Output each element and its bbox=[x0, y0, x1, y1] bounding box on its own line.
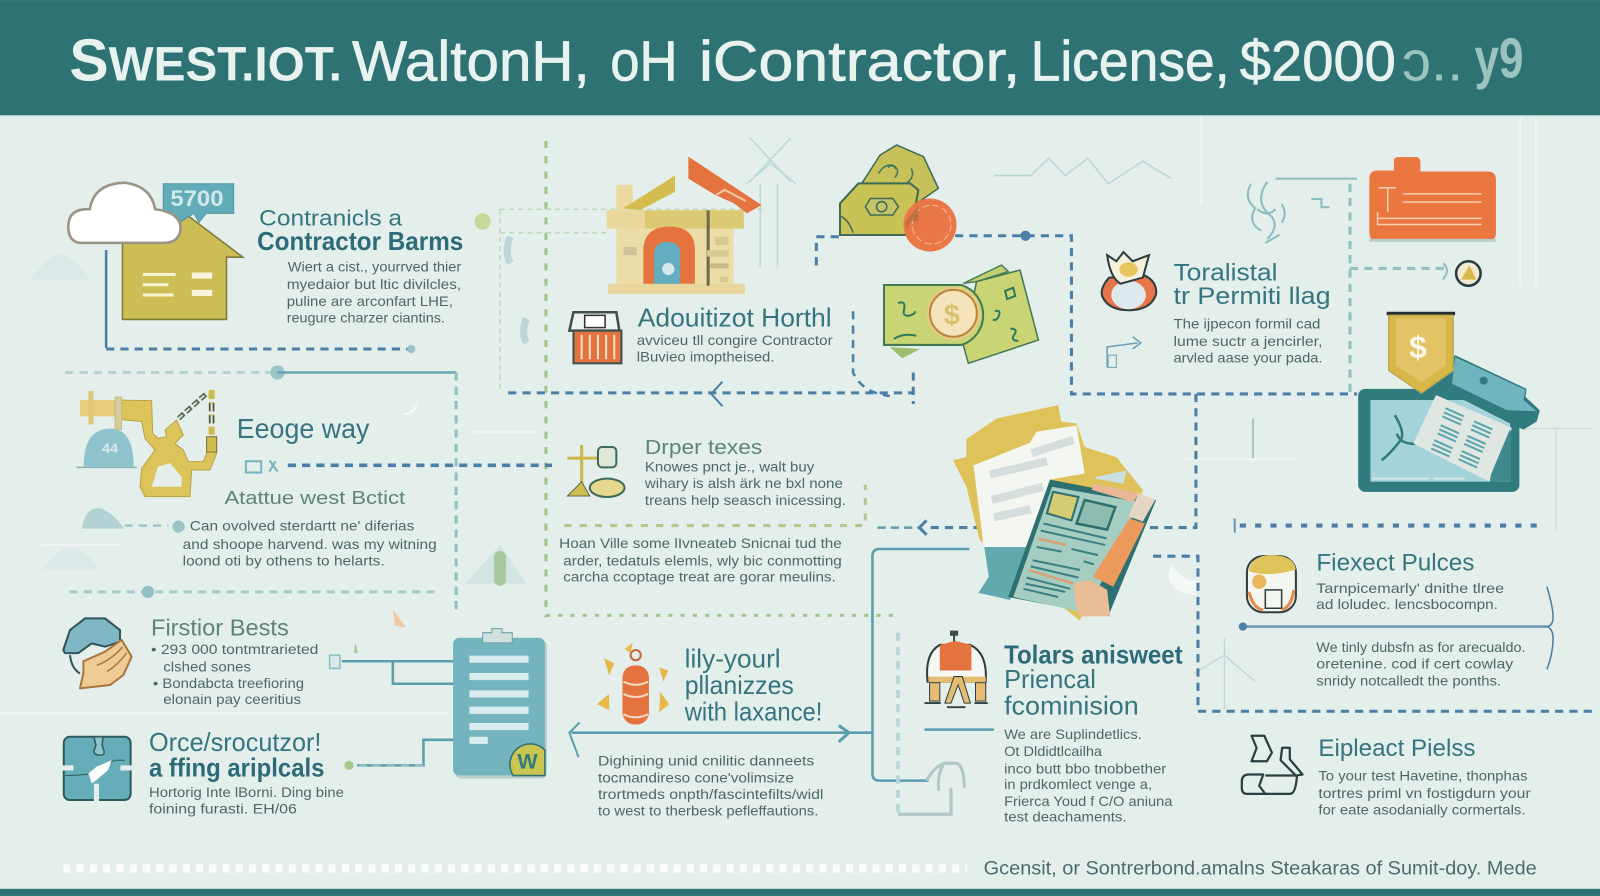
bullet list: • Bondabcta treefioring bbox=[153, 676, 304, 692]
body text bbox=[1173, 317, 1322, 366]
heading: Fiexect Pulces bbox=[1316, 549, 1474, 576]
icon: pipes and chain: 44 bbox=[102, 441, 118, 457]
icon: cash and gold coin bbox=[884, 265, 1038, 363]
body text bbox=[183, 519, 437, 569]
body text: puline are arconfart LHE, bbox=[287, 294, 453, 310]
body text bbox=[149, 785, 344, 817]
icon: clipboard bbox=[453, 629, 547, 779]
title: y9 bbox=[1474, 27, 1523, 90]
icon: wallet with dollar badge: $ bbox=[1409, 329, 1427, 365]
body text: To your test Havetine, thonphas bbox=[1318, 769, 1528, 785]
heading: Eeoge way bbox=[237, 413, 370, 444]
background decorations bbox=[0, 117, 1592, 713]
heading: tr Permiti llag bbox=[1173, 283, 1331, 310]
icon: wallet with dollar badge bbox=[1358, 312, 1540, 492]
body text: arvled aase your pada. bbox=[1173, 350, 1322, 366]
body text bbox=[287, 259, 461, 326]
body text: Knowes pnct je., walt buy bbox=[645, 459, 815, 475]
title: oH bbox=[610, 30, 678, 93]
body text: snridy notcalledt the ponths. bbox=[1316, 674, 1501, 690]
body text: Ot Dldidtlcailha bbox=[1004, 744, 1102, 760]
heading bbox=[1173, 260, 1331, 310]
icon: puzzle piece bbox=[62, 737, 132, 801]
panel: orce srocutzor bbox=[62, 729, 344, 817]
icon: drum bbox=[1247, 555, 1296, 612]
heading: lily-yourl bbox=[685, 645, 781, 673]
subheading: Atattue west Bctict bbox=[224, 487, 405, 508]
icon: documents pile bbox=[953, 405, 1156, 620]
body text bbox=[559, 536, 842, 586]
body text bbox=[598, 753, 823, 819]
body text: Can ovolved sterdartt ne' diferias bbox=[190, 519, 414, 535]
footer note: Gcensit, or Sontrerbond.amalns Steakaras of Sumit-doy. Mede bbox=[984, 858, 1537, 880]
heading: Contranicls a bbox=[259, 206, 403, 231]
body text: myedaior but ltic divilcles, bbox=[287, 277, 461, 293]
icon: boots outline bbox=[1242, 736, 1303, 794]
body text: ad loludec. lencsbocompn. bbox=[1316, 597, 1498, 613]
icon: scale tool bbox=[567, 445, 624, 497]
icon: small badge bbox=[1443, 261, 1481, 286]
heading: a ffing ariplcals bbox=[149, 755, 324, 783]
body text: for eate asodanially cormertals. bbox=[1318, 802, 1526, 818]
panel: eipleact pielss bbox=[1242, 735, 1531, 818]
title: License, bbox=[1031, 30, 1230, 93]
icon: pipes and chain bbox=[77, 390, 217, 497]
icon: orange cylinder with sparks bbox=[597, 643, 669, 725]
body text bbox=[1004, 727, 1173, 825]
body text: Tarnpicemarly' dnithe tlree bbox=[1316, 581, 1504, 597]
icon: clipboard: W bbox=[517, 749, 538, 773]
body text: Hortorig Inte lBorni. Ding bine bbox=[149, 785, 344, 801]
label: price: 5700 bbox=[170, 186, 223, 211]
body text: Hoan Ville some lIvneateb Snicnai tud the bbox=[559, 536, 842, 552]
heading: pllanizzes bbox=[685, 672, 794, 700]
heading: Orce/srocutzor! bbox=[149, 729, 321, 757]
body text: We are Suplindetlics. bbox=[1004, 727, 1142, 743]
body text: treans help seasch inicessing. bbox=[645, 493, 846, 509]
icon: money and coin bbox=[840, 145, 957, 252]
bullet list: • 293 000 tontmtrarieted bbox=[151, 642, 318, 658]
body text: and shoope harvend. was my witning bbox=[183, 537, 437, 553]
icon: lander figure bbox=[924, 631, 988, 707]
heading: Eipleact Pielss bbox=[1318, 735, 1476, 762]
panel: eeoge way bbox=[77, 390, 437, 569]
panel: drper texes bbox=[559, 437, 846, 586]
body text: The ijpecon formil cad bbox=[1173, 317, 1320, 333]
body text: in prdkomlect venge a, bbox=[1004, 777, 1152, 793]
body text bbox=[644, 459, 846, 509]
icon: house bbox=[607, 157, 762, 294]
heading: Priencal bbox=[1004, 666, 1096, 694]
panel: firstior bests bbox=[63, 615, 318, 708]
body text bbox=[637, 333, 833, 365]
title bbox=[69, 27, 1523, 94]
panel: adouitizot horthl bbox=[569, 305, 833, 365]
icon: grey folder outline bbox=[898, 763, 964, 814]
body text: Wiert a cist., yourrved thier bbox=[288, 259, 461, 275]
body text: inco butt bbo tnobbether bbox=[1004, 762, 1167, 778]
title: ↄ.. bbox=[1402, 30, 1463, 93]
body text: avviceu tll congire Contractor bbox=[637, 333, 833, 349]
body text: wihary is alsh ärk ne bxl none bbox=[644, 476, 843, 492]
body text bbox=[1316, 581, 1504, 613]
body text: reugure charzer ciantins. bbox=[287, 310, 445, 326]
heading: Adouitizot Horthl bbox=[638, 305, 832, 333]
bullet list: clshed sones bbox=[163, 659, 251, 675]
heading: fcominision bbox=[1004, 692, 1139, 720]
heading: Firstior Bests bbox=[151, 615, 289, 641]
body text: tortres priml vn fostigdurn your bbox=[1318, 786, 1531, 802]
heading: Toralistal bbox=[1173, 260, 1278, 287]
heading bbox=[149, 729, 324, 783]
body text: trortmeds onpth/fascintefilts/widl bbox=[598, 787, 823, 803]
heading: with laxance! bbox=[684, 698, 822, 726]
body text: test deachaments. bbox=[1004, 809, 1127, 825]
body text: foining furasti. EH/06 bbox=[149, 801, 297, 817]
body text: arder, tedatuls elemls, wly bic conmotting bbox=[563, 553, 842, 569]
bullet list: elonain pay ceeritius bbox=[163, 692, 301, 708]
icon: cash and gold coin: $ bbox=[944, 300, 960, 332]
panel: tolars answer bbox=[898, 631, 1183, 825]
heading: Tolars anisweet bbox=[1004, 641, 1183, 669]
body text: Frierca Youd f C/O aniuna bbox=[1004, 794, 1173, 810]
title: WaltonH, bbox=[352, 30, 590, 93]
body text bbox=[1318, 769, 1531, 818]
heading bbox=[684, 645, 822, 726]
footer band bbox=[0, 889, 1600, 896]
heading bbox=[1004, 641, 1183, 720]
title: iContractor, bbox=[699, 30, 1020, 93]
body text: to west to therbesk pefleffautions. bbox=[598, 803, 818, 819]
connector lines bbox=[63, 141, 1598, 868]
body text: lume suctr a jencirler, bbox=[1173, 334, 1322, 350]
body text: oretenine. cod if cert cowlay bbox=[1316, 656, 1514, 672]
body text: carcha ccoptage treat are gorar meulins. bbox=[563, 570, 836, 586]
heading: Contractor Barms bbox=[257, 228, 463, 256]
icon: orange folder bbox=[1369, 157, 1496, 242]
body text: We tinly dubsfn as for arecualdo. bbox=[1316, 640, 1526, 656]
panel: lily-yourl plan bbox=[597, 643, 823, 819]
body text: Dighining unid cnilitic danneets bbox=[598, 753, 814, 769]
body text: tocmandireso cone'volimsize bbox=[598, 771, 794, 787]
icon: hand and head bbox=[63, 618, 132, 688]
bullet list bbox=[151, 642, 318, 708]
header band bbox=[0, 0, 1600, 117]
icon: house with cloud and price tag bbox=[68, 183, 243, 319]
title: $2000 bbox=[1240, 30, 1396, 93]
panel: contractor farms bbox=[68, 183, 463, 326]
title: SWEST.IOT. bbox=[69, 27, 342, 94]
body text: loond oti by othens to helarts. bbox=[183, 553, 385, 569]
body text: lBuvieo imoptheised. bbox=[637, 349, 774, 365]
heading bbox=[257, 206, 463, 256]
icon: basket bbox=[569, 312, 621, 363]
panel: hero house bbox=[607, 157, 762, 294]
body text bbox=[1316, 640, 1526, 690]
heading: Drper texes bbox=[645, 437, 762, 459]
panel: toralistal permit bbox=[1102, 252, 1331, 366]
panel: fiexect pulces bbox=[1247, 549, 1526, 690]
icon: crown emblem bbox=[1102, 252, 1156, 310]
